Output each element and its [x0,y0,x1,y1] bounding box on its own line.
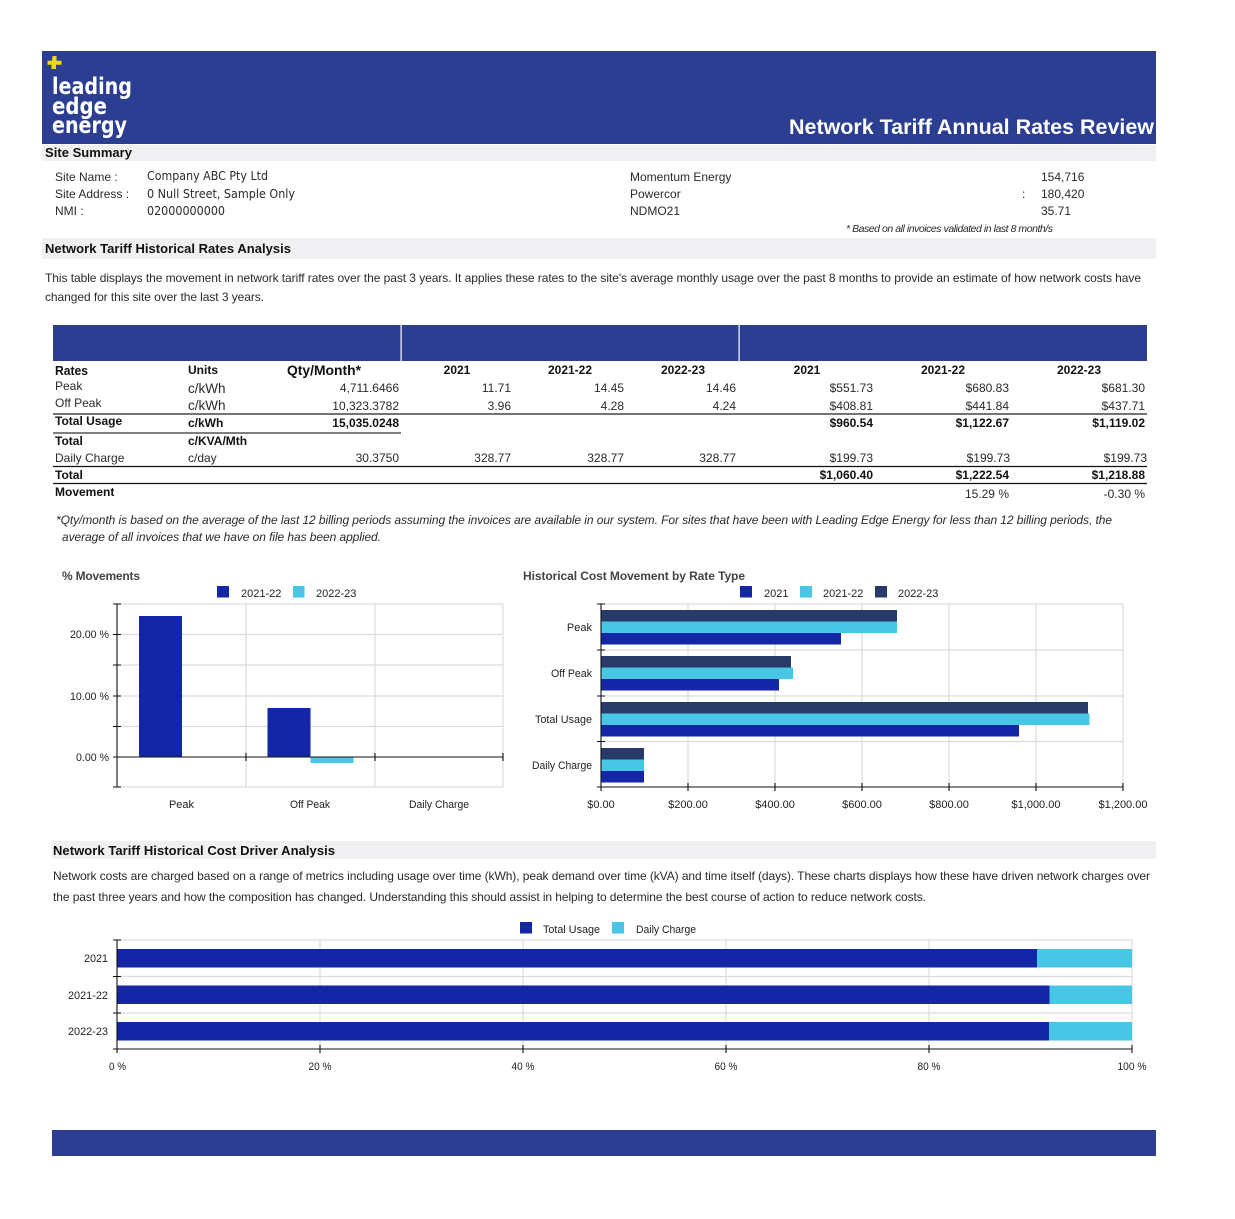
row: off peak: c/kWh [188,398,226,413]
row: movement: 15.29 % [965,487,1009,501]
site details right: Powercor [630,187,681,201]
logo wordmark: energy [52,113,127,139]
cost driver paragraph: the past three years and how the composition has changed. Understanding this should assist in helping to determine the best course of action to reduce network costs. [53,890,926,904]
site details right: Momentum Energy [630,170,731,184]
heading: site summary: Site Summary [45,145,133,160]
legend [520,922,696,936]
row: off peak [55,396,1145,413]
chart: % movements [62,569,503,811]
intro paragraph [45,271,1141,304]
x axis labels: 40 % [512,1061,535,1073]
bars [139,616,354,763]
site details left: Site Address : [55,187,129,201]
row: off peak: Off Peak [55,396,102,410]
site details left [55,169,295,218]
row: total usage: $960.54 [830,416,873,430]
row: peak: Peak [55,379,83,393]
table footnote [56,513,1112,544]
x axis labels: $1,000.00 [1012,799,1060,811]
stacked bars [117,949,1132,1040]
x axis labels: 80 % [918,1061,941,1073]
row: daily charge: 30.3750 [356,451,399,465]
legend: 2022-23 [898,588,938,600]
legend [740,586,938,600]
row: total usage [55,414,1145,430]
x axis labels: $400.00 [755,799,795,811]
y axis labels [70,629,109,764]
table header band [53,325,1147,361]
axes [113,940,1132,1053]
x axis labels [587,799,1147,811]
row: movement: Movement [55,485,114,499]
legend: 2022-23 [316,588,356,600]
column headings: 2022-23 [661,363,705,377]
x axis labels: $1,200.00 [1099,799,1147,811]
x axis labels: $800.00 [929,799,969,811]
x axis labels: $600.00 [842,799,882,811]
y axis labels: Off Peak [551,668,592,680]
row: peak: $551.73 [830,381,873,395]
row: total usage: Total Usage [55,414,122,428]
row: movement [55,485,1145,501]
y axis labels [68,953,108,1038]
site details right [630,170,1085,235]
row: peak: 4,711.6466 [340,381,399,395]
row: daily charge: $199.73 [830,451,873,465]
site details right: : [1022,187,1025,201]
row: total: $1,222.54 [956,468,1009,482]
y axis labels: Total Usage [535,714,592,726]
site details right: 180,420 [1041,187,1085,201]
legend: 2021 [764,588,788,600]
heading: cost driver analysis: Network Tariff Historical Cost Driver Analysis [53,843,335,858]
legend: Daily Charge [636,924,696,936]
row: total: Total [55,468,83,482]
site details left: Site Name : [55,170,118,184]
x axis labels: 60 % [714,1061,738,1073]
row: off peak: $441.84 [966,399,1009,413]
row: total usage: $1,119.02 [1092,416,1145,430]
x axis labels: Peak [169,799,195,811]
x axis labels: 100 % [1118,1061,1147,1073]
y axis labels: 2022-23 [68,1026,108,1038]
column headings: 2021 [794,363,821,377]
row: peak [55,379,1145,396]
x axis labels: 0 % [109,1061,126,1073]
x axis labels [169,799,469,811]
y axis labels: 10.00 % [70,691,109,703]
row: total demand [55,434,247,448]
column headings: Units [188,363,218,377]
axes [597,604,1123,791]
site details left: Company ABC Pty Ltd [147,169,268,183]
legend: 2021-22 [241,588,281,600]
column headings [55,362,1101,378]
logo wordmark: leading [52,74,132,100]
chart title: % Movements [62,569,140,583]
row: peak: 14.45 [594,381,624,395]
rates table [53,325,1147,501]
row: total usage: 15,035.0248 [332,416,399,430]
cost driver paragraph [53,869,1150,904]
legend: 2021-22 [823,588,863,600]
row: off peak: 10,323.3782 [332,399,399,413]
row: peak: 11.71 [482,381,511,395]
heading: site summary [42,145,1156,161]
site details left: 0 Null Street, Sample Only [147,187,295,201]
column headings: 2021 [444,363,471,377]
row: total usage: c/kWh [188,416,223,430]
report title: Network Tariff Annual Rates Review [789,115,1154,139]
cost driver paragraph: Network costs are charged based on a range of metrics including usage over time (kWh), peak demand over time (kVA) and time itself (days). These charts displays how these have driven network charges over [53,869,1150,883]
x axis labels: Daily Charge [409,799,469,811]
footer band [52,1130,1156,1156]
column headings: 2022-23 [1057,363,1101,377]
table footnote: average of all invoices that we have on file has been applied. [62,530,381,544]
icon: yellow plus logo mark [48,56,62,69]
row: daily charge: 328.77 [699,451,736,465]
row: peak: $680.83 [966,381,1009,395]
y axis labels [532,622,592,772]
row: off peak: 4.28 [601,399,624,413]
row: movement: -0.30 % [1104,487,1145,501]
row: total usage: $1,122.67 [956,416,1009,430]
column headings: Qty/Month* [287,362,362,378]
bars [601,610,1090,782]
row: peak: $681.30 [1102,381,1145,395]
row: total: $1,218.88 [1092,468,1145,482]
x axis labels: $0.00 [587,799,615,811]
axes [113,604,503,787]
x axis labels [109,1061,1147,1073]
intro paragraph: changed for this site over the last 3 years. [45,290,264,304]
y axis labels: Daily Charge [532,760,592,772]
y axis labels: 2021 [84,953,108,965]
legend: Total Usage [543,924,600,936]
x axis labels: 20 % [308,1061,332,1073]
site details left: 02000000000 [147,204,225,218]
row: off peak: 3.96 [488,399,511,413]
intro paragraph: This table displays the movement in network tariff rates over the past 3 years. It applies these rates to the site's average monthly usage over the past 8 months to provide an estimate of how network costs have [45,271,1141,285]
table footnote: *Qty/month is based on the average of the last 12 billing periods assuming the invoices are available in our system. For sites that have been with Leading Edge Energy for less than 12 billing periods, the [56,513,1112,527]
legend [217,586,356,600]
site details right: * Based on all invoices validated in last 8 month/s [846,223,1054,235]
header banner [42,51,1156,144]
column headings: 2021-22 [921,363,965,377]
row: total demand: Total [55,434,83,448]
heading: cost driver analysis [52,841,1156,859]
chart: historical cost movement [523,569,1147,811]
column headings: Rates [55,363,88,378]
row: daily charge: $199.73 [967,451,1010,465]
row: total [55,468,1145,482]
row: daily charge: 328.77 [587,451,624,465]
row: peak: 14.46 [706,381,736,395]
row: daily charge: 328.77 [474,451,511,465]
y axis labels: 0.00 % [76,752,109,764]
y axis labels: Peak [567,622,592,634]
row: off peak: 4.24 [713,399,736,413]
chart title: Historical Cost Movement by Rate Type [523,569,745,583]
site details left: NMI : [55,204,84,218]
row: peak: c/kWh [188,381,226,396]
logo wordmark: edge [52,94,107,120]
row: daily charge [55,451,1147,465]
logo wordmark [52,74,132,139]
row: off peak: $437.71 [1102,399,1145,413]
x axis labels: Off Peak [290,799,330,811]
heading: historical rates analysis: Network Tariff Historical Rates Analysis [45,241,291,256]
y axis labels: 2021-22 [68,990,108,1002]
site details right: NDMO21 [630,204,680,218]
row: daily charge: c/day [188,451,217,465]
site details right: 35.71 [1041,204,1071,218]
column headings: 2021-22 [548,363,592,377]
row: off peak: $408.81 [830,399,873,413]
row: daily charge: Daily Charge [55,451,125,465]
heading: historical rates analysis [42,238,1156,259]
y axis labels: 20.00 % [70,629,109,641]
chart: cost composition stacked bars [68,922,1147,1073]
row: total demand: c/KVA/Mth [188,434,247,448]
row: daily charge: $199.73 [1104,451,1147,465]
site details right: 154,716 [1041,170,1085,184]
row: total: $1,060.40 [820,468,873,482]
x axis labels: $200.00 [668,799,708,811]
